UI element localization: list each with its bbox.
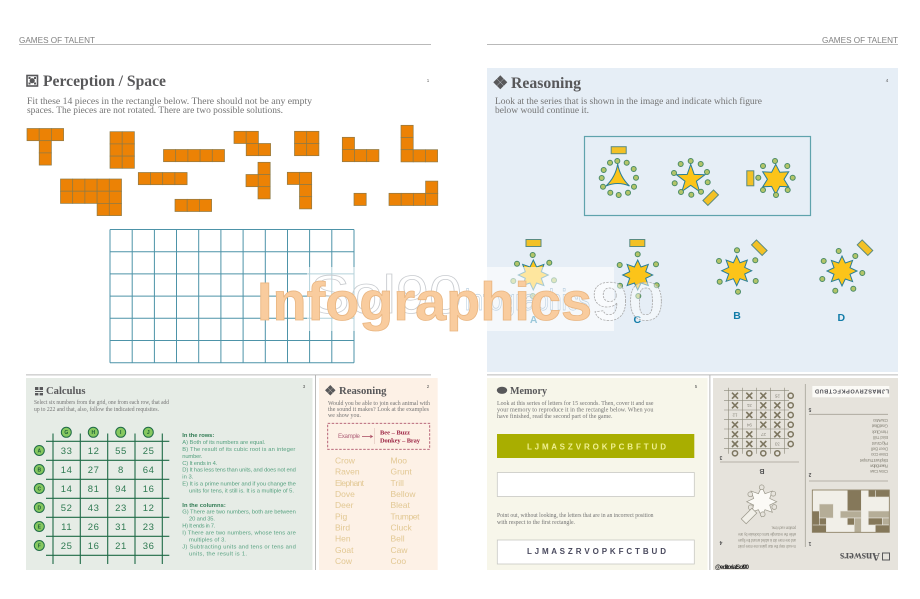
number grid: 16 xyxy=(143,484,155,495)
instructions: Look at this series of letters for 15 seconds. Then, cover it and use xyxy=(497,400,654,407)
example box: Bee – Buzz xyxy=(380,430,410,436)
option A: A xyxy=(530,314,538,326)
option A xyxy=(511,240,556,326)
altered letter strip: L J M A S Z R V O P K F C T B U D xyxy=(527,547,666,556)
instructions: Would you be able to join each animal with xyxy=(328,401,430,407)
sound list: Grunt xyxy=(390,466,412,476)
sound list: Coo xyxy=(390,556,406,566)
answer 2: matched pairs: Hen Cluck xyxy=(871,430,888,434)
answer numbers: 1 xyxy=(808,540,811,546)
number grid: 14 xyxy=(61,484,73,495)
divider: bottom row rules xyxy=(26,374,898,570)
answer 4: explanation: In each step the star gains one more point xyxy=(737,544,796,549)
altered letter strip xyxy=(497,540,694,564)
column and row badges: I xyxy=(120,430,122,436)
example box xyxy=(328,423,430,449)
answer 3: crossed-out grid: 12 xyxy=(732,413,738,418)
answer 3: crossed-out grid xyxy=(724,388,793,456)
credit: @editorialSol90 xyxy=(715,565,750,571)
answer 2: matched pairs: Goat Bleat xyxy=(871,424,888,428)
answer 3: crossed-out grid: 27 xyxy=(760,432,766,437)
clues: G) There are two numbers, both are between xyxy=(182,510,296,516)
clues: units, the result is 1. xyxy=(189,552,247,558)
answer 2: matched pairs: Cow Moo xyxy=(873,418,888,423)
empty answer box xyxy=(497,472,694,496)
series box xyxy=(584,136,810,216)
column and row badges: B xyxy=(37,467,41,473)
option B xyxy=(716,240,767,322)
animal list: Deer xyxy=(335,500,354,510)
answer 4: star figure xyxy=(741,485,777,524)
watermark: Sol90 xyxy=(310,265,462,325)
instructions xyxy=(328,401,430,419)
animal list: Elephant xyxy=(335,478,365,488)
animal list: Goat xyxy=(335,545,354,555)
column and row badges: A xyxy=(37,448,41,454)
answer 2: matched pairs: Dove Coo xyxy=(871,452,888,457)
answer 4: explanation: position each time. xyxy=(771,526,796,530)
answer 2: matched pairs: Bird Trill xyxy=(873,435,888,440)
header: left page: GAMES OF TALENT xyxy=(19,36,95,45)
instructions: your memory to reproduce it in the rectangle below. When you xyxy=(497,408,654,414)
watermark: Infographics xyxy=(257,272,592,332)
number grid: 52 xyxy=(61,503,73,514)
sound list: Bleat xyxy=(390,500,411,510)
number grid: 33 xyxy=(61,446,73,457)
instructions: the sound it makes? Look at the examples xyxy=(328,407,430,413)
clues: In the columns: xyxy=(182,503,226,509)
page number 2: 2 xyxy=(427,384,430,389)
answer 3: crossed-out grid: 25 xyxy=(774,394,780,398)
column and row badges: D xyxy=(37,505,41,511)
instructions: we show you. xyxy=(328,413,361,419)
option B: B xyxy=(733,310,741,322)
clues: In the rows: xyxy=(182,433,214,439)
heading: perception / space: Perception / Space xyxy=(43,73,166,90)
panel: perception / space xyxy=(27,73,438,363)
icon: dice xyxy=(27,76,38,86)
number grid: 27 xyxy=(88,465,100,476)
panel: reasoning (animal sounds) xyxy=(319,378,438,570)
icon: calculator xyxy=(35,387,43,395)
answer numbers: 4 xyxy=(719,539,722,545)
page number 3: 3 xyxy=(303,384,306,389)
heading: reasoning: Reasoning xyxy=(511,75,581,92)
clues xyxy=(182,433,296,558)
answer 1: puzzle solution xyxy=(812,490,889,532)
answer 2: matched pairs: Crow Caw xyxy=(869,469,888,474)
number grid: 25 xyxy=(143,446,155,457)
animal list: Bird xyxy=(335,522,350,532)
page number 5: 5 xyxy=(695,384,698,389)
answer 3: crossed-out grid: 31 xyxy=(746,403,752,408)
puzzle pieces xyxy=(27,125,438,216)
sound list xyxy=(390,456,420,566)
panel: memory xyxy=(487,378,708,570)
letter strip: L J M A S Z V R O K P C B F T U D xyxy=(527,442,666,452)
clues: A) Both of its numbers are equal. xyxy=(182,440,266,446)
instructions: Select six numbers from the grid, one from each row, that add xyxy=(34,399,169,406)
example box: Example xyxy=(338,433,361,440)
letter strip xyxy=(497,434,694,458)
sound list: Bellow xyxy=(390,489,416,499)
heading: calculus: Calculus xyxy=(46,385,86,397)
animal list: Hen xyxy=(335,534,351,544)
column and row badges: J xyxy=(147,430,150,436)
clues: units for tens, it still is. It is a multiple of 5. xyxy=(189,489,294,495)
instructions xyxy=(34,399,169,413)
icon: brain xyxy=(497,387,507,394)
number grid: 26 xyxy=(88,522,100,533)
animal list: Pig xyxy=(335,512,348,522)
number grid: 36 xyxy=(143,541,155,552)
sound list: Trumpet xyxy=(390,512,420,522)
answer numbers: 3 xyxy=(719,454,722,460)
answer 4: explanation xyxy=(737,526,796,549)
empty answer grid xyxy=(110,230,354,363)
watermark: 90 xyxy=(592,272,664,332)
answer 2: matched pairs: Pig Grunt xyxy=(871,441,888,446)
divider lines xyxy=(720,384,888,547)
answer 4: explanation: and one more dot is added around the figure xyxy=(738,538,796,543)
clues: 20 and 35. xyxy=(189,517,215,523)
number grid: 16 xyxy=(88,541,100,552)
sound list: Cluck xyxy=(390,522,413,532)
column and row badges: F xyxy=(38,543,41,549)
heading: reasoning: Reasoning xyxy=(339,385,387,397)
panel: calculus xyxy=(26,378,312,570)
figure 2: five-point star xyxy=(672,158,718,205)
animal list: Cow xyxy=(335,556,353,566)
clues: B) The result of its cubic root is an integer xyxy=(182,447,295,453)
clues: I) There are two numbers, whose tens are xyxy=(182,531,296,537)
clues: in 3. xyxy=(182,474,194,480)
answer 4: letter B: B xyxy=(759,467,765,474)
clues: H) It ends in 7. xyxy=(182,524,216,530)
number grid: 23 xyxy=(115,503,127,514)
option C: C xyxy=(634,314,642,326)
sound list: Trill xyxy=(390,478,404,488)
animal list xyxy=(335,456,365,566)
instructions: up to 222 and that, also, follow the indicated requisites. xyxy=(34,406,160,413)
panel: answers (upside down) xyxy=(713,378,898,571)
answer 2: matched pairs: Raven Bellow xyxy=(869,464,888,468)
number grid: 94 xyxy=(115,484,127,495)
icon: diamond cluster xyxy=(325,385,336,396)
instructions xyxy=(497,400,654,420)
option D: D xyxy=(838,312,846,324)
number grid: 64 xyxy=(143,465,155,476)
sound list: Caw xyxy=(390,545,408,555)
answer numbers: 2 xyxy=(808,471,811,477)
answer 2: matched pairs xyxy=(859,418,888,474)
figure 1: three-point star xyxy=(599,147,638,198)
page number 4: 4 xyxy=(886,78,889,83)
clues: E) It is a prime number and if you change the xyxy=(182,481,296,487)
instructions xyxy=(27,96,312,116)
instructions: Look at the series that is shown in the image and indicate which figure xyxy=(495,96,762,107)
number grid xyxy=(46,434,169,564)
number grid: 81 xyxy=(88,484,100,495)
instructions: have finished, read the second part of the game. xyxy=(497,413,613,420)
number grid: 25 xyxy=(61,541,73,552)
number grid: 43 xyxy=(88,503,100,514)
number grid: 8 xyxy=(118,465,124,476)
instructions: Fit these 14 pieces in the rectangle below. There should not be any empty xyxy=(27,96,312,107)
sound list: Moo xyxy=(390,456,407,466)
column and row badges: G xyxy=(64,430,68,436)
instructions: spaces. The pieces are not rotated. There are two possible solutions. xyxy=(27,105,283,116)
answer 2: matched pairs: Deer Bell xyxy=(871,446,888,452)
number grid: 11 xyxy=(61,522,72,533)
second instructions: Point out, without looking, the letters that are in an incorrect position xyxy=(497,513,654,519)
answer numbers xyxy=(719,406,811,546)
instructions: below would continue it. xyxy=(495,105,589,116)
clues: number. xyxy=(182,454,203,460)
number grid: 21 xyxy=(115,541,127,552)
answer 5: marked letters: L J M A S Z R V O P K F C T B U D xyxy=(815,388,889,394)
answer 3: crossed-out grid: 94 xyxy=(746,422,752,427)
watermark: infographics xyxy=(465,284,590,317)
column and row badges: E xyxy=(38,524,42,530)
column and row badges: C xyxy=(37,486,41,492)
column and row badges: H xyxy=(91,430,95,436)
clues: C) It ends in 4. xyxy=(182,461,218,467)
number grid: 55 xyxy=(115,446,127,457)
answer 2: matched pairs: Elephant Trumpet xyxy=(859,458,888,463)
clues: D) It has less tens than units, and does not end xyxy=(182,468,296,474)
option D xyxy=(820,240,873,324)
number grid: 31 xyxy=(115,522,127,533)
heading: memory: Memory xyxy=(510,385,547,397)
clues: multiples of 3. xyxy=(189,538,226,544)
number grid: 12 xyxy=(143,503,155,514)
second instructions: with respect to the first rectangle. xyxy=(497,519,575,526)
number grid: 14 xyxy=(61,465,73,476)
example box: Donkey – Bray xyxy=(380,438,421,444)
icon: diamond cluster xyxy=(493,75,507,89)
answer 5: marked letters xyxy=(812,386,889,397)
header: right page: GAMES OF TALENT xyxy=(822,36,898,45)
answer numbers: 5 xyxy=(808,406,811,412)
answer 4: explanation: while the rectangle turns clockwise by one xyxy=(738,532,796,537)
icon: dice xyxy=(882,553,890,560)
instructions xyxy=(495,96,762,116)
answer 3: crossed-out grid: 33 xyxy=(774,442,780,447)
animal list: Raven xyxy=(335,466,360,476)
number grid: 12 xyxy=(88,446,100,457)
figure 3: six-point star xyxy=(747,158,795,198)
second instructions xyxy=(497,513,654,526)
clues: J) Subtracting units and tens or tens and xyxy=(182,545,296,551)
panel: reasoning (series) xyxy=(487,68,898,372)
column and row badges xyxy=(34,427,153,550)
sound list: Bell xyxy=(390,534,405,544)
option C xyxy=(617,240,659,326)
heading: answers: Answers xyxy=(840,550,880,562)
page number 1: 1 xyxy=(427,78,430,83)
number grid: 23 xyxy=(143,522,155,533)
animal list: Crow xyxy=(335,456,356,466)
animal list: Dove xyxy=(335,489,355,499)
